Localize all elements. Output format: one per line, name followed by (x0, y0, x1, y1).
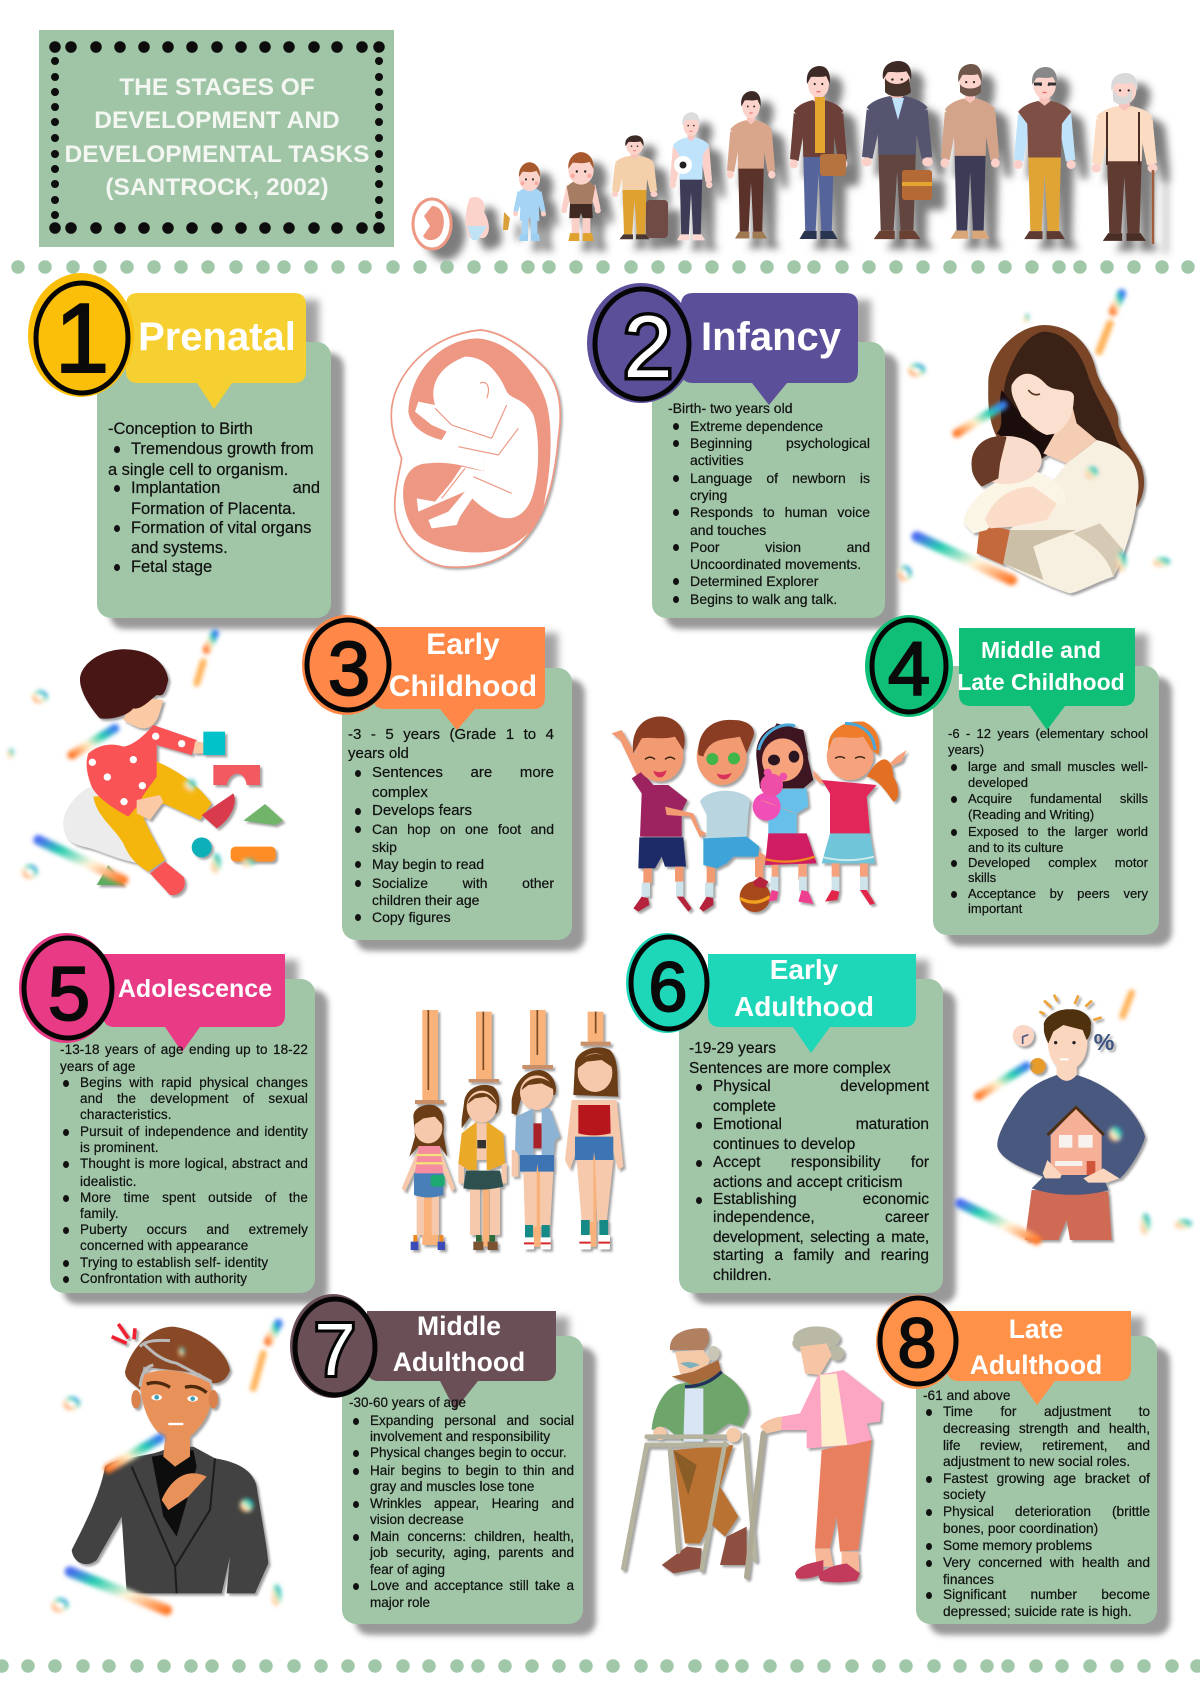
panel: early adulthood: actions and accept criticism (713, 1174, 903, 1191)
panel: early adulthood: independence, career (713, 1209, 929, 1226)
panel: early adulthood: starting a family and rearing (713, 1247, 929, 1264)
panel: infancy: Beginning psychological (690, 435, 870, 451)
header: middle adulthood: Adulthood (393, 1347, 525, 1377)
header: adolescence (103, 954, 285, 1052)
number badge 2 (587, 283, 695, 403)
panel: late adulthood (916, 1336, 1157, 1624)
panel: early adulthood: Physical development (713, 1078, 929, 1095)
panel: middle adulthood: Physical changes begin to occur. (370, 1445, 567, 1460)
header: late adulthood: Adulthood (970, 1350, 1102, 1380)
panel: late adulthood: Very concerned with health and (943, 1555, 1150, 1570)
panel: early adulthood: -19-29 years (689, 1040, 776, 1057)
panel: infancy: activities (690, 452, 744, 468)
header: early adulthood (708, 954, 916, 1053)
number badge 2: 2 (624, 297, 672, 396)
dotted divider top (18, 260, 1188, 274)
panel: middle and late childhood: important (968, 901, 1022, 916)
illustration: fetus in womb (391, 330, 560, 567)
panel: adolescence: Trying to establish self- identity (80, 1255, 268, 1270)
panel: prenatal: Formation of vital organs (131, 519, 311, 537)
panel: infancy: crying (690, 487, 727, 503)
panel: adolescence: Puberty occurs and extremely (80, 1222, 308, 1237)
panel: infancy: Language of newborn is (690, 470, 870, 486)
panel: early childhood: Sentences are more (372, 764, 554, 781)
panel: middle adulthood: -30-60 years of age (349, 1395, 466, 1410)
panel: adolescence: and the development of sexual (80, 1091, 308, 1106)
panel: early adulthood (679, 979, 943, 1293)
panel: prenatal: Implantation and (131, 479, 320, 497)
title banner: THE STAGES OF (119, 74, 315, 101)
header: middle and late childhood (957, 628, 1135, 730)
number badge 1 (28, 273, 134, 397)
panel: infancy (652, 342, 885, 618)
panel: adolescence: idealistic. (80, 1174, 137, 1189)
panel: prenatal: -Conception to Birth (108, 420, 253, 438)
panel: prenatal: and systems. (131, 539, 228, 557)
panel: middle adulthood: Main concerns: children, health, (370, 1529, 574, 1544)
dotted divider bottom (2, 1659, 1197, 1673)
panel: late adulthood: Fastest growing age bracket of (943, 1471, 1150, 1486)
panel: late adulthood: -61 and above (923, 1388, 1011, 1403)
panel: adolescence: More time spent outside of the (80, 1190, 308, 1205)
header: adolescence: Adolescence (118, 975, 272, 1003)
header: middle and late childhood: Middle and (981, 637, 1101, 663)
header: early adulthood: Early (770, 954, 839, 985)
panel: prenatal: Formation of Placenta. (131, 500, 296, 518)
panel: middle adulthood: job security, aging, parents and (370, 1545, 574, 1560)
icon: iridescent sparkles around middle-aged man (53, 1323, 281, 1610)
number badge 4: 4 (888, 627, 930, 712)
panel: late adulthood: decreasing strength and health, (943, 1421, 1150, 1436)
number badge 3 (302, 615, 390, 715)
panel: adolescence: years of age (60, 1059, 136, 1074)
panel: adolescence: concerned with appearance (80, 1238, 248, 1253)
panel: early adulthood: children. (713, 1267, 772, 1284)
number badge 5: 5 (48, 952, 90, 1037)
panel: middle and late childhood (933, 666, 1159, 935)
panel: prenatal: Fetal stage (131, 558, 212, 576)
panel: infancy: Begins to walk ang talk. (690, 591, 837, 607)
panel: middle and late childhood: Developed complex motor (968, 855, 1148, 870)
panel: middle and late childhood: years) (948, 742, 984, 757)
panel: middle and late childhood: -6 - 12 years (elementary school (948, 726, 1148, 741)
panel: infancy: Poor vision and (690, 539, 870, 555)
panel: adolescence: Begins with rapid physical changes (80, 1075, 308, 1090)
panel: late adulthood: Physical deterioration (brittle (943, 1504, 1150, 1519)
panel: middle adulthood: major role (370, 1595, 430, 1610)
icon: iridescent sparkles around toddler (7, 633, 255, 880)
panel: late adulthood: bones, poor coordination) (943, 1521, 1098, 1536)
panel: infancy: and touches (690, 522, 766, 538)
header: middle adulthood (367, 1311, 556, 1410)
number badge 8: 8 (898, 1304, 936, 1382)
header: early childhood: Childhood (389, 670, 537, 703)
panel: middle and late childhood: Acquire fundamental skills (968, 791, 1148, 806)
panel: early childhood: Copy figures (372, 909, 451, 925)
panel: middle and late childhood: (Reading and Writing) (968, 807, 1094, 822)
panel: infancy: Determined Explorer (690, 573, 818, 589)
panel: prenatal (97, 342, 331, 618)
panel: middle and late childhood: developed (968, 775, 1028, 790)
panel: early childhood: complex (372, 784, 428, 801)
panel: late adulthood: depressed; suicide rate is high. (943, 1604, 1132, 1619)
illustration: middle-aged man with greying hair (72, 1324, 268, 1593)
panel: early childhood: years old (348, 745, 409, 762)
panel: prenatal: a single cell to organism. (108, 461, 288, 479)
panel: infancy: Uncoordinated movements. (690, 556, 861, 572)
panel: infancy: -Birth- two years old (668, 400, 792, 416)
number badge 1: 1 (55, 283, 109, 393)
header: early adulthood: Adulthood (734, 991, 874, 1022)
panel: adolescence: characteristics. (80, 1107, 172, 1122)
illustration: toddler playing with blocks (63, 649, 283, 895)
panel: adolescence: Pursuit of independence and identity (80, 1124, 308, 1139)
panel: early childhood: May begin to read (372, 856, 484, 872)
panel: middle adulthood: gray and muscles lose tone (370, 1479, 534, 1494)
panel: adolescence (50, 979, 315, 1293)
illustration: elderly couple with walker and cane (623, 1326, 882, 1582)
panel: early childhood: Socialize with other (372, 875, 554, 891)
panel: adolescence: Confrontation with authority (80, 1271, 247, 1286)
header: infancy (681, 293, 858, 405)
number badge 7: 7 (314, 1308, 356, 1391)
panel: early childhood: Can hop on one foot and (372, 821, 554, 837)
panel: late adulthood: Time for adjustment to (943, 1404, 1150, 1419)
header: infancy: Infancy (701, 315, 842, 359)
panel: middle and late childhood: Exposed to the larger world (968, 824, 1148, 839)
number badge 5 (19, 933, 113, 1043)
panel: middle adulthood: vision decrease (370, 1512, 464, 1527)
illustration: man holding a house (997, 995, 1145, 1240)
header: late adulthood (947, 1311, 1131, 1405)
number badge 8 (876, 1295, 958, 1389)
title banner (39, 30, 394, 247)
panel: middle adulthood: involvement and responsibility (370, 1429, 550, 1444)
title banner: DEVELOPMENTAL TASKS (65, 141, 369, 168)
header: middle adulthood: Middle (417, 1311, 501, 1341)
number badge 6 (626, 933, 708, 1033)
panel: middle adulthood: Expanding personal and social (370, 1413, 574, 1428)
illustration: mother holding baby (963, 325, 1144, 593)
panel: late adulthood: Some memory problems (943, 1538, 1092, 1553)
title banner: (SANTROCK, 2002) (105, 174, 329, 201)
panel: middle and late childhood: large and small muscles well- (968, 759, 1148, 774)
panel: early childhood: Develops fears (372, 802, 472, 819)
panel: late adulthood: life review, retirement, and (943, 1438, 1150, 1453)
panel: early childhood: -3 - 5 years (Grade 1 to 4 (348, 726, 554, 743)
panel: late adulthood: adjustment to new social roles. (943, 1454, 1130, 1469)
header: prenatal (126, 293, 306, 409)
header: early childhood: Early (426, 628, 500, 661)
number badge 6: 6 (649, 948, 687, 1026)
panel: middle adulthood: Hair begins to begin to thin and (370, 1463, 574, 1478)
panel: late adulthood: society (943, 1487, 986, 1502)
panel: infancy: Responds to human voice (690, 504, 870, 520)
number badge 4 (865, 615, 953, 717)
header: middle and late childhood: Late Childhood (957, 669, 1125, 695)
panel: early adulthood: Sentences are more complex (689, 1060, 891, 1077)
panel: adolescence: -13-18 years of age ending up to 18-22 (60, 1042, 308, 1057)
panel: middle adulthood: fear of aging (370, 1562, 445, 1577)
illustration: row of life-stage figures (413, 61, 1157, 249)
panel: prenatal: Tremendous growth from (131, 440, 314, 458)
number badge 7 (290, 1294, 376, 1398)
panel: early adulthood: complete (713, 1098, 776, 1115)
panel: adolescence: family. (80, 1206, 119, 1221)
panel: middle adulthood (342, 1336, 583, 1624)
panel: middle and late childhood: Acceptance by peers very (968, 886, 1148, 901)
panel: early adulthood: continues to develop (713, 1136, 855, 1153)
header: prenatal: Prenatal (138, 315, 296, 359)
panel: early adulthood: Accept responsibility for (713, 1154, 929, 1171)
panel: early childhood (342, 668, 572, 940)
title banner: DEVELOPMENT AND (94, 107, 340, 134)
icon: iridescent sparkles around man with house (960, 993, 1192, 1240)
panel: early adulthood: development, selecting a mate, (713, 1229, 929, 1246)
panel: adolescence: Thought is more logical, abstract and (80, 1156, 308, 1171)
panel: early childhood: skip (372, 839, 397, 855)
illustration: four children (612, 717, 907, 912)
illustration: man holding a house: % (1094, 1029, 1115, 1055)
icon: iridescent sparkles around mother (900, 293, 1170, 580)
panel: late adulthood: Significant number become (943, 1587, 1150, 1602)
panel: early childhood: children their age (372, 892, 479, 908)
header: early childhood (373, 627, 545, 730)
panel: middle adulthood: Wrinkles appear, Hearing and (370, 1496, 574, 1511)
panel: middle adulthood: Love and acceptance still take a (370, 1578, 574, 1593)
panel: adolescence: is prominent. (80, 1140, 159, 1155)
panel: infancy: Extreme dependence (690, 418, 823, 434)
panel: middle and late childhood: and to its culture (968, 840, 1063, 855)
panel: late adulthood: finances (943, 1572, 994, 1587)
header: late adulthood: Late (1009, 1314, 1063, 1344)
panel: early adulthood: Establishing economic (713, 1191, 929, 1208)
illustration: girls measured against rulers (402, 1010, 623, 1250)
panel: middle and late childhood: skills (968, 870, 996, 885)
number badge 3: 3 (328, 627, 370, 712)
panel: early adulthood: Emotional maturation (713, 1116, 929, 1133)
